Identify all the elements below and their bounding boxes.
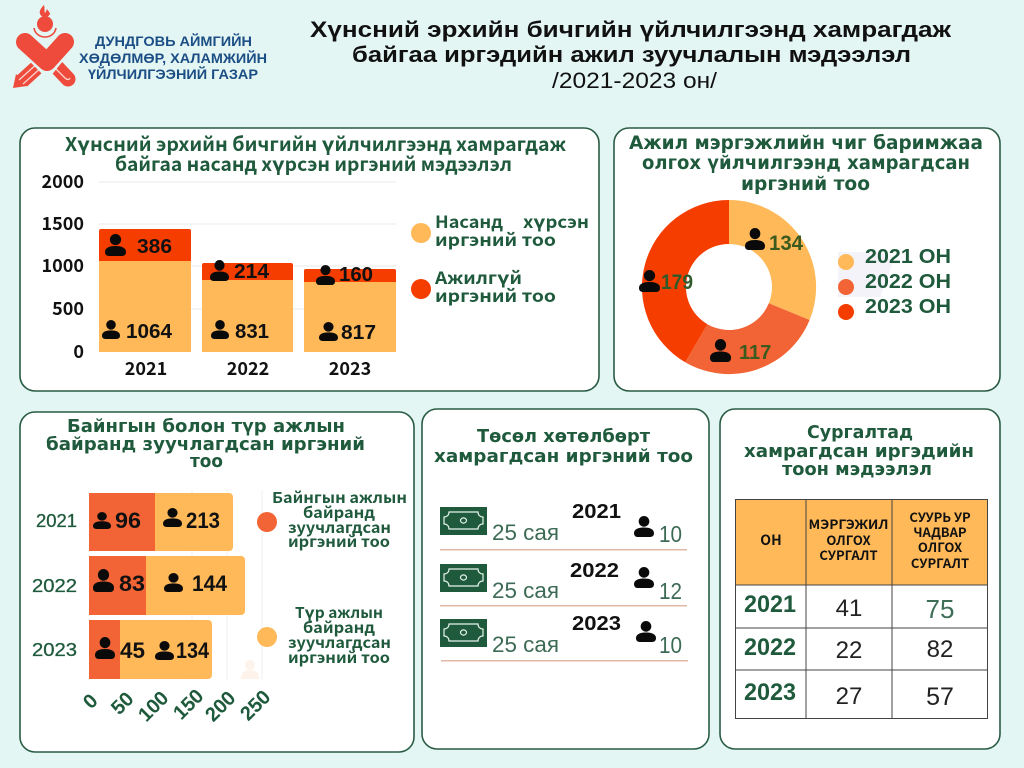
x axis: 100 <box>134 687 173 726</box>
bar values: 160 <box>339 264 373 286</box>
table rows: 41 <box>836 595 862 622</box>
heading <box>434 426 693 467</box>
donut chart <box>642 200 816 374</box>
table header: СУРГАЛТ <box>819 545 878 564</box>
x axis: 250 <box>236 686 275 725</box>
donut values: 134 <box>769 232 803 255</box>
legend: иргэний тоо <box>435 226 556 251</box>
icon: faded person <box>241 660 259 679</box>
year labels: 2022 <box>32 576 77 596</box>
x axis: 200 <box>201 687 240 726</box>
heading: хамрагдсан иргэдийн <box>744 441 974 462</box>
title: Хүнсний эрхийн бичгийн үйлчилгээнд хамрагдаж <box>310 17 951 42</box>
title: /2021-2023 он/ <box>552 68 718 93</box>
table header: СУУРЬ УР <box>909 507 971 526</box>
x axis: 150 <box>169 685 208 724</box>
y axis: 500 <box>52 295 84 321</box>
organization name: ҮЙЛЧИЛГЭЭНИЙ ГАЗАР <box>88 65 258 82</box>
bar values: 831 <box>235 321 269 343</box>
legend: Түр ажлын <box>295 602 383 623</box>
row: 2023: 10 <box>659 632 682 658</box>
panel: training table <box>720 409 1000 749</box>
row: 2023: 2023 <box>572 613 621 635</box>
panel: adults stacked bar chart <box>20 128 599 391</box>
heading: Сургалтад <box>807 422 913 443</box>
y axis: 0 <box>73 338 84 364</box>
logo <box>13 5 267 88</box>
table rows: 22 <box>836 637 862 664</box>
table rows: 75 <box>926 594 954 624</box>
legend <box>257 487 407 668</box>
bar values: 214 <box>234 261 270 283</box>
legend: байранд <box>303 617 375 638</box>
year labels: 2023 <box>32 640 77 660</box>
legend: зуучлагдсан <box>288 632 391 653</box>
row: 2022: 12 <box>659 578 682 604</box>
bar values: 144 <box>192 571 228 596</box>
table rows: 27 <box>836 683 862 710</box>
heading: иргэний тоо <box>741 173 870 195</box>
table header: СУРГАЛТ <box>911 553 969 572</box>
donut values: 179 <box>661 271 693 294</box>
bars <box>89 493 245 679</box>
bar values <box>93 508 228 663</box>
table header: ЧАДВАР <box>913 522 967 541</box>
bar values: 83 <box>119 571 145 596</box>
heading: олгох үйлчилгээнд хамрагдсан <box>642 152 970 174</box>
bar values: 134 <box>176 638 210 663</box>
legend: иргэний тоо <box>288 531 390 552</box>
row: 2021 <box>440 501 687 550</box>
bar values: 213 <box>186 508 220 533</box>
panel: permanent and temporary jobs bar chart <box>20 412 414 752</box>
bar values: 96 <box>115 508 141 533</box>
heading <box>744 422 974 480</box>
legend: 2023 ОН <box>865 296 951 318</box>
table rows: 57 <box>926 683 954 711</box>
table header: МЭРГЭЖИЛ <box>808 514 888 533</box>
organization name: ХӨДӨЛМӨР, ХАЛАМЖИЙН <box>79 49 267 66</box>
heading: Төсөл хөтөлбөрт <box>477 426 651 447</box>
table header: ОЛГОХ <box>918 537 962 556</box>
y axis: 1000 <box>42 252 84 278</box>
x axis: 2023 <box>329 355 371 381</box>
bars <box>99 229 396 352</box>
heading: Хүнсний эрхийн бичгийн үйлчилгээнд хамрагдаж <box>65 130 566 157</box>
row: 2022: 25 сая <box>492 578 559 603</box>
row: 2023 <box>440 613 688 662</box>
bar values: 386 <box>137 236 172 258</box>
legend: Ажилгүй <box>434 264 522 289</box>
title: байгаа иргэдийн ажил зуучлалын мэдээлэл <box>352 42 911 67</box>
panel: projects and programmes <box>422 409 709 749</box>
legend: Байнгын ажлын <box>272 487 407 508</box>
donut values <box>639 228 803 364</box>
x axis: 50 <box>107 688 138 719</box>
row: 2022: 2022 <box>570 560 619 582</box>
organization name <box>79 32 267 82</box>
year labels <box>32 511 77 660</box>
legend: 2021 ОН <box>865 246 951 268</box>
legend <box>411 208 589 307</box>
legend: зуучлагдсан <box>288 517 391 538</box>
heading <box>629 132 983 195</box>
table rows: 2021 <box>744 591 796 618</box>
heading: тоо <box>190 451 223 472</box>
panel: vocational guidance donut chart <box>614 128 1000 391</box>
donut values: 117 <box>739 342 771 364</box>
bar values <box>102 234 376 344</box>
x axis <box>79 685 275 726</box>
legend: хүрсэн <box>523 208 589 233</box>
heading <box>46 416 365 472</box>
heading: тоон мэдээлэл <box>782 459 932 480</box>
icon: logo emblem <box>13 5 70 88</box>
x axis: 2021 <box>125 355 167 381</box>
row: 2021: 10 <box>659 521 682 547</box>
row: 2022 <box>440 560 687 606</box>
row: 2023: 25 сая <box>492 632 559 657</box>
table header <box>760 507 971 572</box>
legend: иргэний тоо <box>288 647 390 668</box>
legend: Насанд <box>435 208 503 233</box>
year labels: 2021 <box>36 511 77 531</box>
x axis: 0 <box>79 690 102 713</box>
table header: ОЛГОХ <box>826 530 871 549</box>
heading <box>65 130 566 177</box>
heading: Ажил мэргэжлийн чиг баримжаа <box>629 132 983 154</box>
legend: иргэний тоо <box>435 282 556 307</box>
table header: ОН <box>760 530 782 550</box>
legend: байранд <box>303 502 375 523</box>
bar values: 1064 <box>126 321 173 343</box>
y axis: 2000 <box>42 168 84 194</box>
table rows <box>744 591 954 711</box>
row: 2021: 25 сая <box>492 520 559 545</box>
legend <box>838 246 951 320</box>
legend: 2022 ОН <box>865 271 951 293</box>
heading: байгаа насанд хүрсэн иргэний мэдээлэл <box>115 150 512 177</box>
table rows: 82 <box>927 636 953 663</box>
table <box>736 500 988 718</box>
bar values: 45 <box>120 638 145 663</box>
title <box>310 17 951 93</box>
bar values: 817 <box>341 322 376 344</box>
heading: хамрагдсан иргэний тоо <box>434 446 693 467</box>
table rows: 2022 <box>744 634 796 661</box>
y axis <box>42 168 84 364</box>
table rows: 2023 <box>744 679 796 706</box>
heading: байранд зуучлагдсан иргэний <box>46 434 365 455</box>
organization name: ДУНДГОВЬ АЙМГИЙН <box>95 32 252 49</box>
heading: Байнгын болон түр ажлын <box>67 416 345 437</box>
row: 2021: 2021 <box>572 501 621 523</box>
x axis: 2022 <box>227 355 269 381</box>
x axis <box>125 355 371 381</box>
y axis: 1500 <box>42 210 84 236</box>
